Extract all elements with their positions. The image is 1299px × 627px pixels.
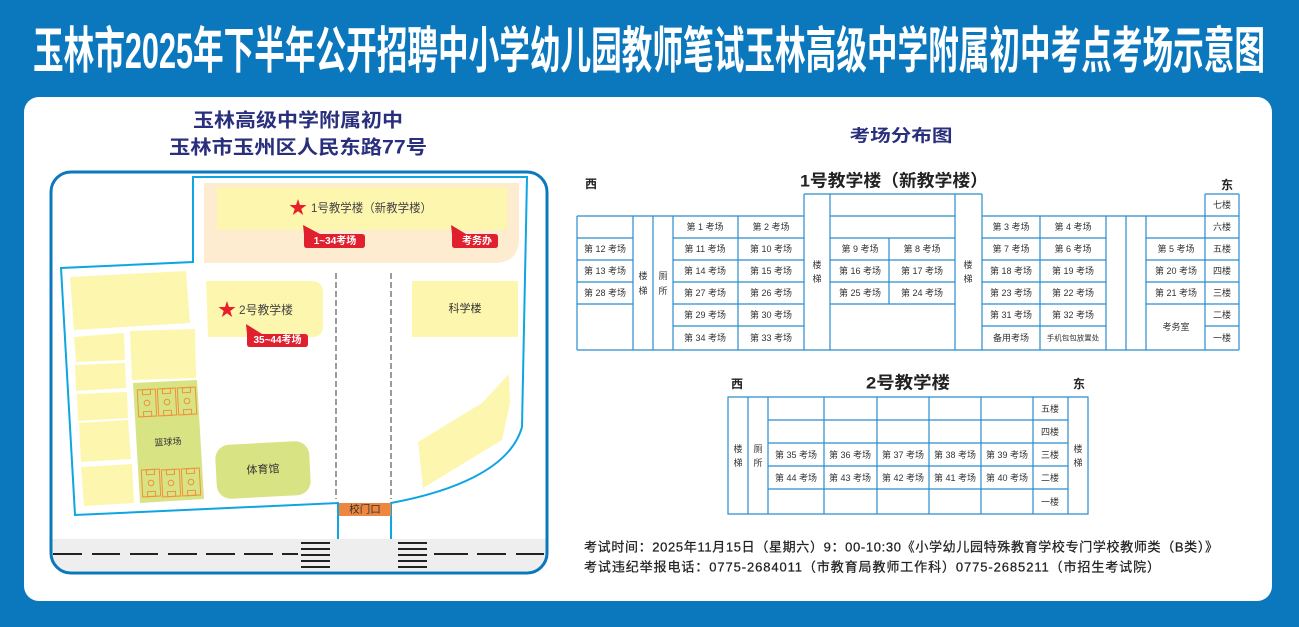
- rooms: 第 12 考场: [584, 243, 626, 254]
- callout: exam office: 考务办: [462, 234, 492, 247]
- rooms: 第 38 考场: [934, 449, 976, 460]
- icon: star: [218, 301, 236, 317]
- west side yellow buildings: [70, 271, 196, 506]
- road: [52, 539, 546, 571]
- rooms: 第 34 考场: [684, 332, 726, 343]
- panel: campus map: [51, 172, 547, 573]
- rooms: 手机包包放置处: [1047, 332, 1100, 342]
- floor labels: 二楼: [1213, 309, 1231, 320]
- rooms: 第 1 考场: [686, 221, 724, 232]
- dashed campus road: [336, 273, 391, 499]
- school gate: [339, 502, 391, 516]
- gymnasium: [215, 441, 311, 499]
- heading: school name and address: [169, 108, 427, 158]
- heading: building 2: 2号教学楼: [866, 372, 950, 392]
- rooms: 第 44 考场: [775, 472, 817, 483]
- stairs and toilets: 楼: [1073, 443, 1083, 454]
- stairs and toilets: 厕: [658, 271, 668, 281]
- floor labels: [1213, 199, 1231, 343]
- rooms: 第 22 考场: [1052, 287, 1094, 298]
- rooms: 第 5 考场: [1157, 243, 1195, 254]
- school gate: 校门口: [349, 502, 381, 516]
- rooms: 第 10 考场: [750, 243, 792, 254]
- rooms: 第 32 考场: [1052, 309, 1094, 320]
- rooms: [775, 449, 1028, 483]
- rooms: 第 14 考场: [684, 265, 726, 276]
- court icons: [137, 387, 201, 497]
- callout: rooms 1-34: [303, 225, 365, 248]
- building 1: 1号教学楼（新教学楼）: [311, 200, 432, 215]
- science building: [412, 281, 518, 337]
- grid: [577, 194, 1239, 350]
- rooms: 第 39 考场: [986, 449, 1028, 460]
- stairs and toilets: 梯: [1073, 457, 1083, 468]
- building 2: 2号教学楼: [239, 302, 293, 317]
- rooms: 第 43 考场: [829, 472, 871, 483]
- stairs and toilets: 梯: [812, 273, 822, 284]
- exam time and hotline: 考试违纪举报电话：0775-2684011（市教育局教师工作科）0775-2685211（市招生考试院）: [584, 560, 1160, 574]
- stairs and toilets: 厕: [753, 444, 763, 454]
- rooms: 第 35 考场: [775, 449, 817, 460]
- heading: school name and address: 玉林市玉州区人民东路77号: [169, 136, 427, 158]
- rooms: 第 18 考场: [990, 265, 1032, 276]
- rooms: 第 30 考场: [750, 309, 792, 320]
- basketball courts: 篮球场: [154, 435, 182, 448]
- callout: rooms 35-44: [246, 324, 308, 347]
- callout: rooms 1-34: 1~34考场: [314, 234, 356, 247]
- rooms: 第 15 考场: [750, 265, 792, 276]
- heading: distribution: 考场分布图: [850, 126, 952, 146]
- rooms: 第 6 考场: [1054, 243, 1092, 254]
- stairs and toilets: 楼: [638, 270, 648, 281]
- rooms: 第 20 考场: [1155, 265, 1197, 276]
- rooms: 第 25 考场: [839, 287, 881, 298]
- rooms: 第 13 考场: [584, 265, 626, 276]
- rooms: 第 3 考场: [992, 221, 1030, 232]
- building 2: [206, 281, 323, 337]
- panel: building 2 floor plan: [728, 372, 1088, 514]
- stairs and toilets: 所: [753, 458, 763, 468]
- floor labels: 五楼: [1213, 243, 1231, 254]
- rooms: 第 21 考场: [1155, 287, 1197, 298]
- exam time and hotline: [584, 540, 1218, 574]
- rooms: 第 2 考场: [752, 221, 790, 232]
- basketball courts: [133, 380, 204, 503]
- rooms: 第 16 考场: [839, 265, 881, 276]
- heading: building 1: 1号教学楼（新教学楼）: [800, 170, 988, 190]
- panel: building 1 floor plan: [577, 170, 1239, 350]
- rooms: 第 17 考场: [901, 265, 943, 276]
- east side yellow area: [418, 374, 510, 488]
- building 1: [204, 183, 519, 263]
- rooms: 第 40 考场: [986, 472, 1028, 483]
- rooms: 第 31 考场: [990, 309, 1032, 320]
- floor labels: 一楼: [1213, 332, 1231, 343]
- stairs and toilets: 梯: [963, 273, 973, 284]
- label: east: 东: [1221, 177, 1233, 192]
- rooms: 备用考场: [993, 332, 1029, 343]
- floor labels: 四楼: [1213, 265, 1231, 276]
- stairs and toilets: 梯: [638, 285, 648, 296]
- rooms: 第 27 考场: [684, 287, 726, 298]
- stairs and toilets: 楼: [812, 259, 822, 270]
- label: west: 西: [731, 377, 743, 391]
- gymnasium: 体育馆: [246, 461, 280, 477]
- floor labels: 一楼: [1041, 496, 1059, 507]
- rooms: 第 24 考场: [901, 287, 943, 298]
- grid: [728, 397, 1088, 514]
- floor labels: 三楼: [1213, 287, 1231, 298]
- stairs and toilets: 楼: [733, 443, 743, 454]
- stairs and toilets: [638, 259, 973, 296]
- floor labels: 七楼: [1213, 199, 1231, 210]
- exam time and hotline: 考试时间：2025年11月15日（星期六）9：00-10:30《小学幼儿园特殊教育学校专门学校教师类（B类）》: [584, 540, 1218, 554]
- floor labels: [1041, 403, 1059, 507]
- rooms: 第 36 考场: [829, 449, 871, 460]
- rooms: 第 29 考场: [684, 309, 726, 320]
- rooms: 第 19 考场: [1052, 265, 1094, 276]
- icon: star: [290, 199, 306, 215]
- rooms: 第 8 考场: [903, 243, 941, 254]
- rooms: 第 9 考场: [841, 243, 879, 254]
- stairs and toilets: 所: [658, 286, 668, 296]
- floor labels: 四楼: [1041, 426, 1059, 437]
- panel: white card: [24, 97, 1272, 601]
- rooms: 第 7 考场: [992, 243, 1030, 254]
- rooms: 考务室: [1162, 321, 1190, 332]
- stairs and toilets: [733, 443, 1083, 468]
- floor labels: 三楼: [1041, 449, 1059, 460]
- rooms: 第 23 考场: [990, 287, 1032, 298]
- rooms: 第 42 考场: [882, 472, 924, 483]
- floor labels: 二楼: [1041, 472, 1059, 483]
- rooms: 第 26 考场: [750, 287, 792, 298]
- map frame: [51, 172, 547, 573]
- label: east: 东: [1073, 376, 1085, 391]
- label: west: 西: [585, 177, 597, 191]
- callout: exam office: [451, 225, 498, 248]
- stairs and toilets: 梯: [733, 457, 743, 468]
- floor labels: 六楼: [1213, 221, 1231, 232]
- callout: rooms 35-44: 35~44考场: [253, 333, 302, 346]
- rooms: 第 11 考场: [684, 243, 726, 254]
- rooms: 第 33 考场: [750, 332, 792, 343]
- heading: school name and address: 玉林高级中学附属初中: [193, 108, 403, 132]
- science building: 科学楼: [448, 301, 482, 315]
- rooms: 第 28 考场: [584, 287, 626, 298]
- rooms: 第 41 考场: [934, 472, 976, 483]
- rooms: 第 4 考场: [1054, 221, 1092, 232]
- stairs and toilets: 楼: [963, 259, 973, 270]
- rooms: [584, 221, 1197, 343]
- campus boundary: [61, 177, 527, 539]
- rooms: 第 37 考场: [882, 449, 924, 460]
- floor labels: 五楼: [1041, 403, 1059, 414]
